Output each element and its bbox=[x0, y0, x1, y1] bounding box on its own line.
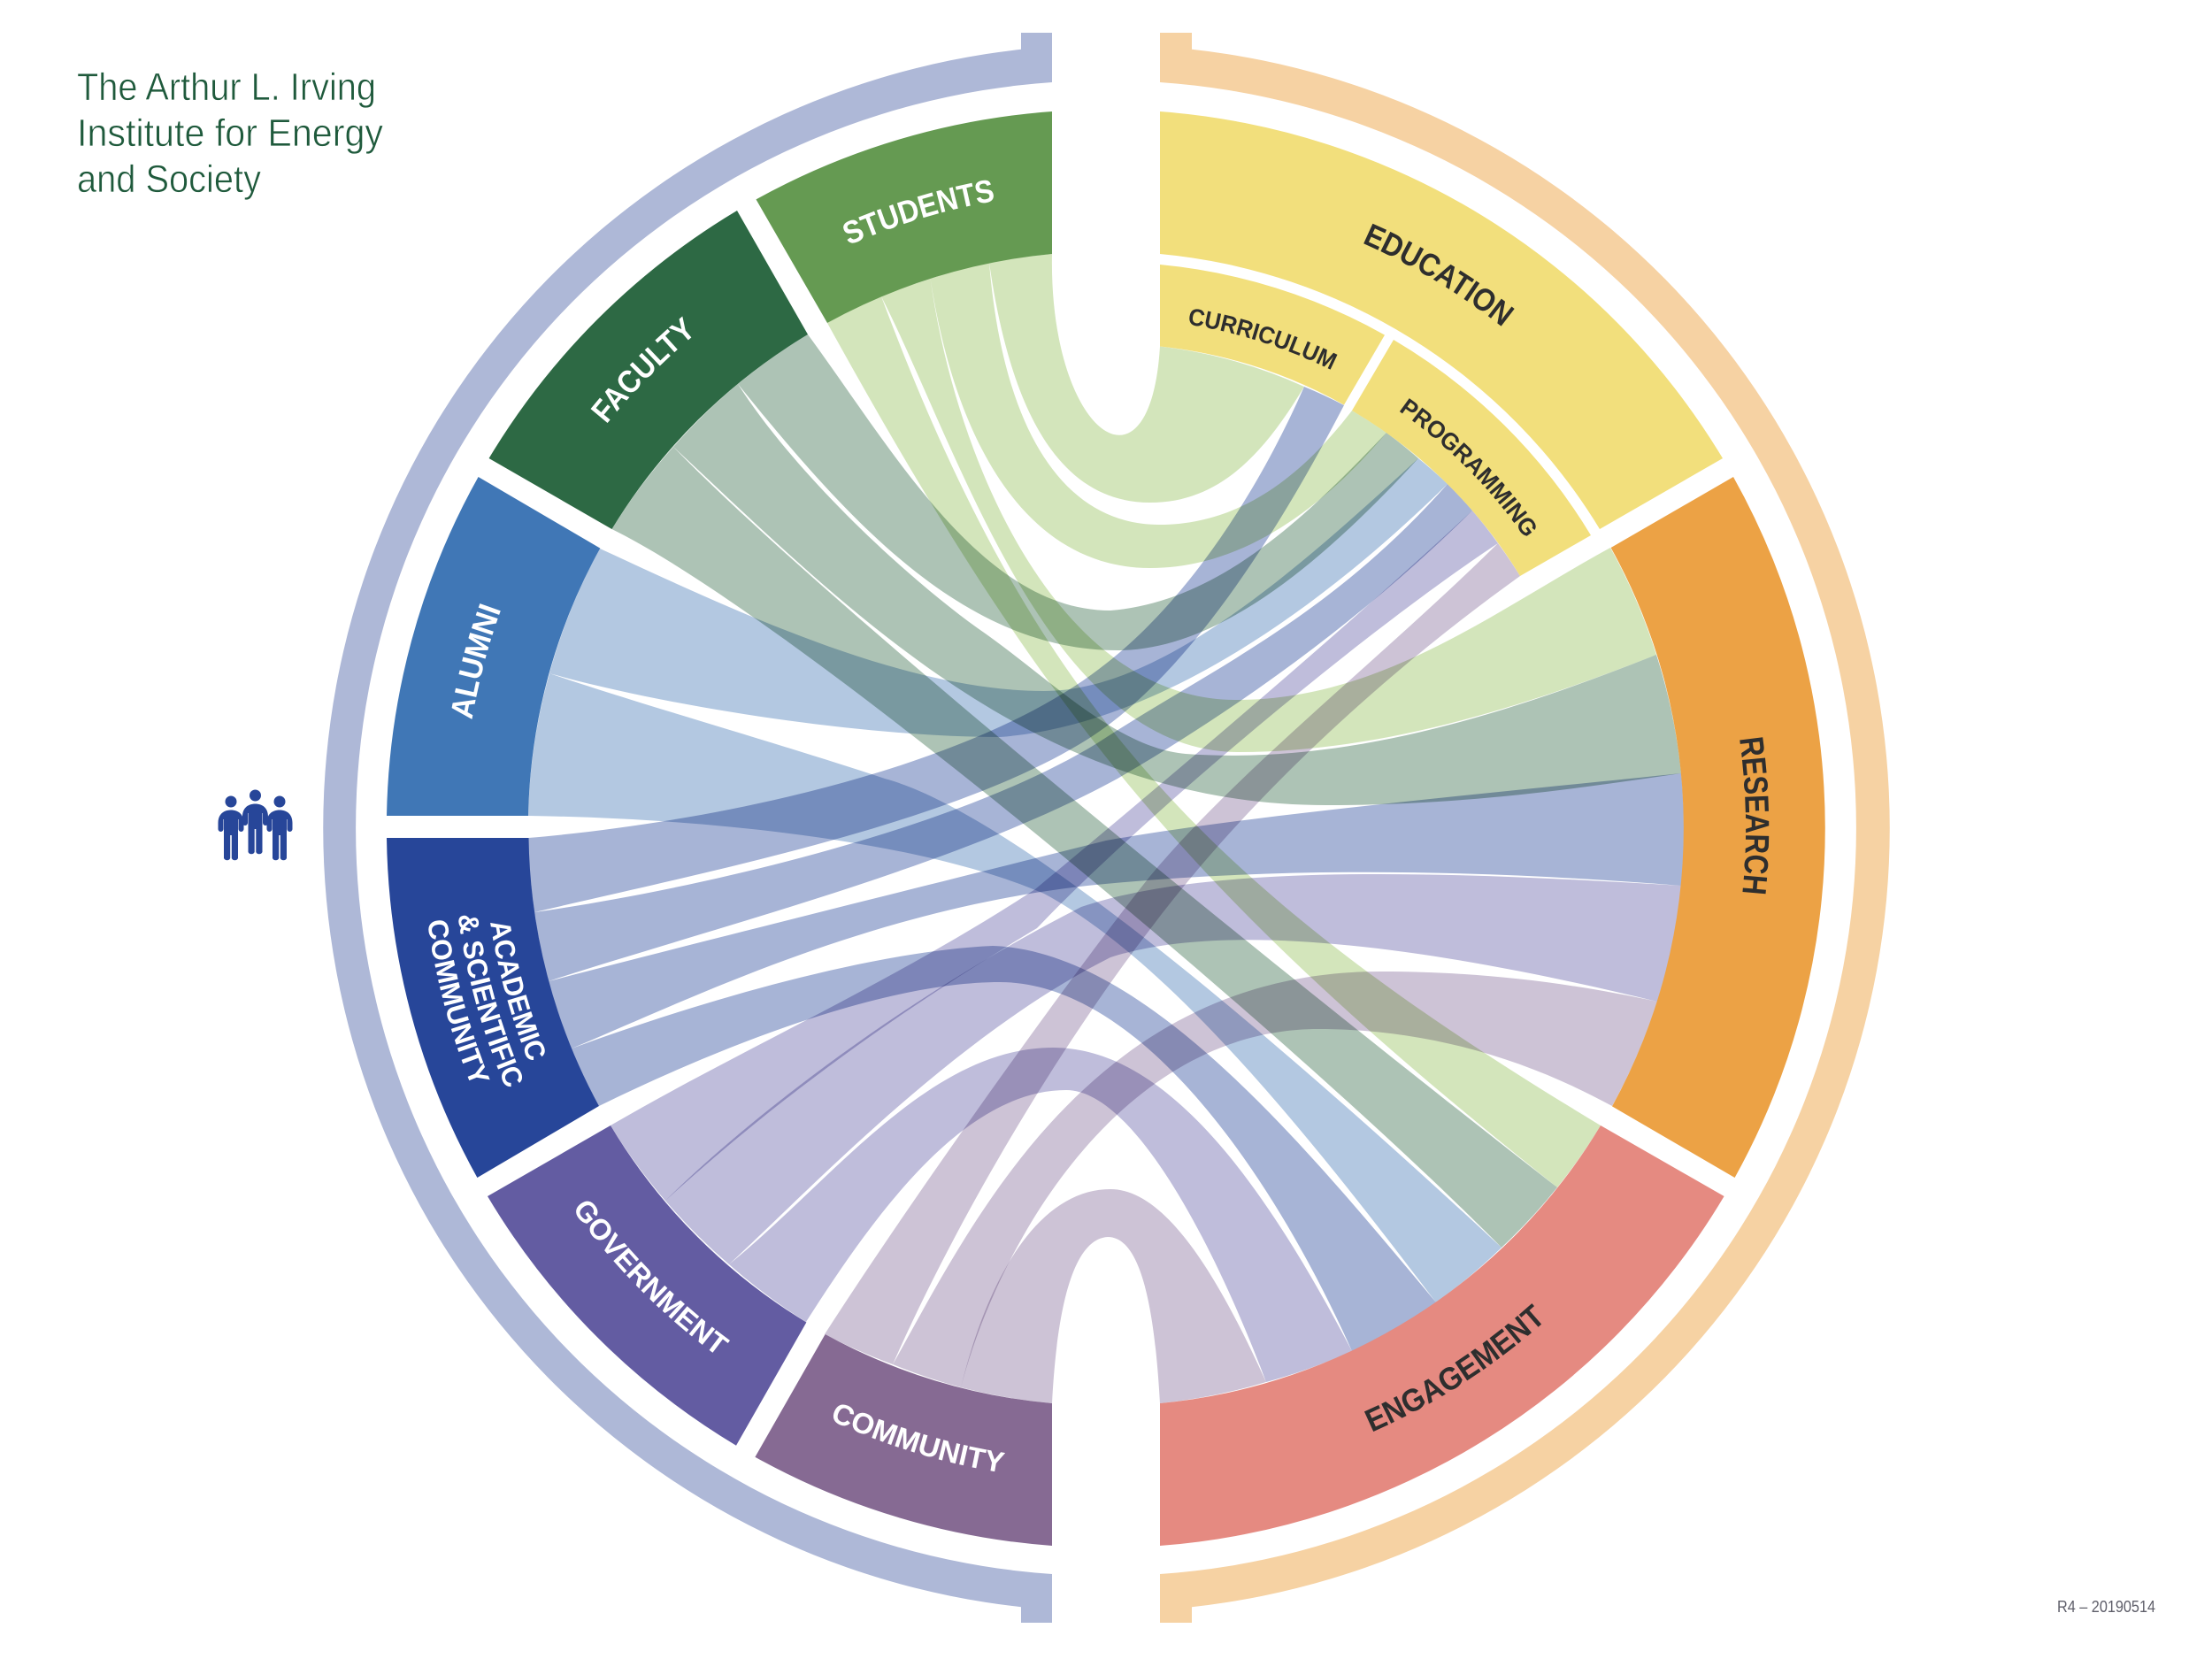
segment: faculty: FACULTY bbox=[591, 317, 692, 423]
segment: engagement: ENGAGEMENT bbox=[1364, 1303, 1541, 1432]
ribbon: students to curriculum bbox=[989, 254, 1304, 503]
segment: students: STUDENTS bbox=[843, 180, 994, 243]
ribbon: academic to curriculum bbox=[528, 387, 1344, 912]
ribbon: faculty to programming bbox=[738, 334, 1418, 650]
ribbon: academic to research bbox=[549, 773, 1684, 1048]
title: and Society bbox=[77, 157, 261, 201]
ribbon: faculty to engagement bbox=[612, 447, 1557, 1248]
outer ring: activities (right) bbox=[1160, 33, 1890, 1623]
segment: programming bbox=[1352, 340, 1591, 576]
ribbon: community to research bbox=[893, 972, 1657, 1387]
segment: academic and scientific community: ACADEMIC bbox=[490, 923, 545, 1060]
segment: academic and scientific community: & SCIENTIFIC bbox=[458, 915, 522, 1087]
ribbon: students to research bbox=[881, 279, 1656, 752]
icon: three people bbox=[218, 789, 292, 860]
segment: curriculum bbox=[1160, 265, 1385, 405]
segment: faculty bbox=[488, 211, 808, 529]
segment: research bbox=[1610, 477, 1825, 1178]
ribbon: academic to programming bbox=[534, 484, 1472, 981]
ribbon: faculty to research bbox=[673, 384, 1681, 805]
segment: curriculum: CURRICULUM bbox=[1189, 309, 1338, 370]
ribbon: students to engagement bbox=[827, 296, 1601, 1187]
segment: community bbox=[756, 1334, 1052, 1546]
segment: research: RESEARCH bbox=[1740, 737, 1770, 894]
outer ring: stakeholders (left) bbox=[323, 33, 1052, 1623]
segment: academic and scientific community bbox=[387, 838, 599, 1178]
ribbon: academic to engagement bbox=[572, 946, 1436, 1351]
segment: community: COMMUNITY bbox=[833, 1405, 1005, 1472]
ribbon: government to engagement bbox=[729, 1048, 1352, 1382]
segment: education bbox=[1160, 111, 1723, 529]
segment: government: GOVERNMENT bbox=[576, 1202, 730, 1353]
segment: academic and scientific community: COMMUNITY bbox=[428, 920, 490, 1081]
segment: students bbox=[756, 111, 1052, 323]
title: Institute for Energy bbox=[77, 111, 383, 155]
ribbon: community to engagement bbox=[961, 1189, 1266, 1403]
ribbon: government to research bbox=[665, 874, 1681, 1264]
ribbon: government to programming bbox=[611, 511, 1498, 1201]
segment: education: EDUCATION bbox=[1363, 223, 1515, 326]
title bbox=[77, 65, 383, 201]
ribbon: community to programming bbox=[825, 543, 1520, 1364]
chord ribbons bbox=[528, 254, 1684, 1403]
ribbon: students to programming bbox=[931, 263, 1386, 568]
revision note: R4 – 20190514 bbox=[2057, 1598, 2155, 1616]
segment: engagement bbox=[1160, 1125, 1724, 1546]
ribbon: alumni to programming bbox=[549, 458, 1448, 737]
ribbon: alumni to engagement bbox=[528, 673, 1502, 1302]
segment: government bbox=[488, 1125, 807, 1446]
segment: alumni bbox=[387, 477, 600, 816]
title: The Arthur L. Irving bbox=[77, 65, 376, 109]
segment: alumni: ALUMNI bbox=[451, 603, 501, 719]
segment: programming: PROGRAMMING bbox=[1400, 398, 1536, 536]
